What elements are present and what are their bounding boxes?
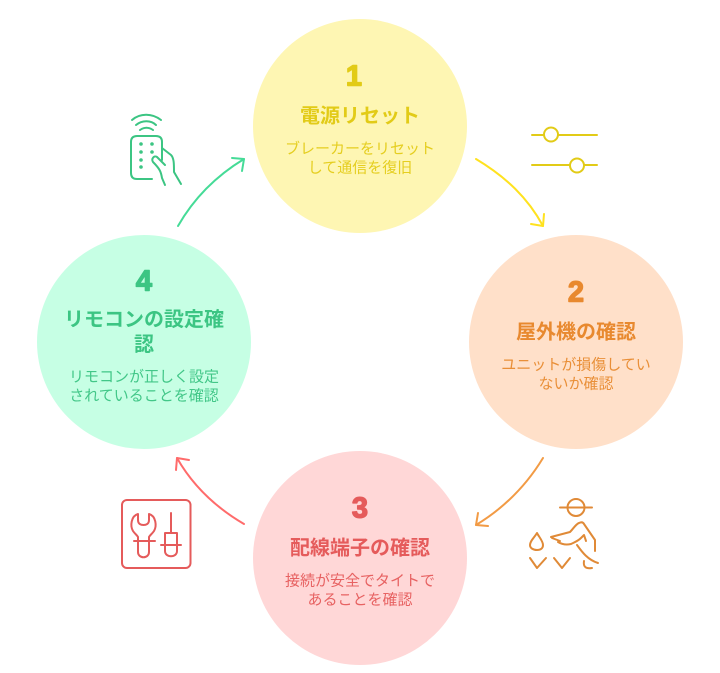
icon: wrench and screwdriver panel: [122, 500, 190, 568]
step 1: circle panel: [253, 19, 467, 233]
step 2: circle panel: [469, 235, 683, 449]
arrow: step 1 to step 2: [476, 159, 544, 226]
step 2 title: 屋外機の確認: [516, 320, 636, 344]
step 3: circle panel: [253, 451, 467, 665]
step 3 number: 3: [352, 492, 368, 524]
arrow: step 4 to step 1: [178, 158, 244, 226]
step 4 description: されていることを確認: [69, 388, 219, 404]
icon: technician with plants: [530, 499, 598, 568]
step 2 description: ないか確認: [538, 376, 614, 392]
step 1 title: 電源リセット: [300, 104, 420, 128]
step 4 number: 4: [136, 266, 152, 298]
step 3 description: 接続が安全でタイトで: [285, 572, 435, 590]
step 4 title: リモコンの設定確: [64, 308, 224, 331]
step 1 description: して通信を復旧: [308, 160, 412, 176]
arrow: step 3 to step 4: [176, 458, 244, 524]
step 1 number: 1: [346, 60, 362, 92]
step 2 number: 2: [568, 276, 584, 308]
icon: sliders: [532, 128, 597, 172]
step 3 title: 配線端子の確認: [290, 536, 430, 560]
step 4 description: リモコンが正しく設定: [69, 368, 219, 386]
arrow: step 2 to step 3: [476, 458, 543, 526]
step 2 description: ユニットが損傷してい: [501, 356, 651, 374]
step 1 description: ブレーカーをリセット: [285, 140, 435, 158]
icon: remote control in hand: [131, 115, 181, 185]
step 3 description: あることを確認: [307, 592, 413, 608]
step 4: circle panel: [37, 235, 251, 449]
step 4 title: 認: [134, 334, 154, 356]
